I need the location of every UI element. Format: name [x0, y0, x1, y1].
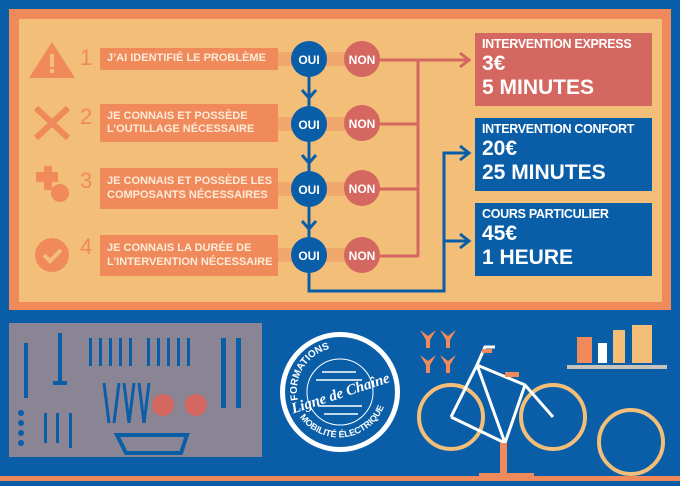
OUI / NON circles: OUI	[298, 183, 320, 197]
step 2 text	[100, 104, 278, 142]
OUI / NON circles: OUI	[298, 53, 320, 67]
result: cours: 45€	[482, 222, 517, 245]
result: express: 3€	[482, 52, 505, 75]
OUI / NON circles: NON	[349, 182, 375, 196]
panel: tool board	[9, 323, 262, 457]
blue connectors	[302, 60, 469, 291]
bottom strip	[0, 476, 680, 481]
OUI / NON circles: NON	[349, 249, 375, 263]
illustration: bike workshop	[417, 325, 667, 476]
result: cours: COURS PARTICULIER	[482, 207, 609, 221]
row bands	[278, 52, 368, 262]
result: express: 5 MINUTES	[482, 76, 594, 99]
step 3 text	[100, 168, 278, 209]
badge: Ligne de Chaîne: MOBILITÉ ÉLECTRIQUE	[300, 404, 384, 438]
step 1 text	[100, 48, 278, 70]
red connectors	[362, 53, 469, 257]
panel: decision flow	[9, 9, 671, 310]
result: cours	[475, 203, 652, 276]
badge: Ligne de Chaîne: Ligne de Chaîne	[288, 370, 392, 418]
step 3 text: JE CONNAIS ET POSSÈDE LES COMPOSANTS NÉCESSAIRES	[107, 175, 272, 200]
result: confort: 25 MINUTES	[482, 161, 606, 184]
result: cours: 1 HEURE	[482, 246, 573, 269]
step 4 text	[100, 235, 278, 276]
result: confort: 20€	[482, 137, 517, 160]
result: confort	[475, 118, 652, 191]
badge: Ligne de Chaîne: FORMATIONS	[290, 342, 329, 400]
flow lines and nodes	[29, 41, 472, 292]
text: 4	[80, 234, 92, 259]
OUI / NON circles: NON	[349, 53, 375, 67]
text: 2	[80, 104, 92, 129]
result: express	[475, 33, 652, 106]
OUI / NON circles	[291, 41, 380, 273]
numbers: 1	[80, 45, 92, 70]
OUI / NON circles: NON	[349, 117, 375, 131]
step 2 text: JE CONNAIS ET POSSÈDE L’OUTILLAGE NÉCESSAIRE	[107, 110, 254, 135]
OUI / NON circles: OUI	[298, 118, 320, 132]
badge: Ligne de Chaîne	[280, 332, 400, 452]
result: express: INTERVENTION EXPRESS	[482, 37, 631, 51]
result: confort: INTERVENTION CONFORT	[482, 122, 634, 136]
OUI / NON circles: OUI	[298, 249, 320, 263]
step 4 text: JE CONNAIS LA DURÉE DE L’INTERVENTION NÉCESSAIRE	[107, 242, 272, 268]
text: 3	[80, 168, 92, 193]
step 1 text: J’AI IDENTIFIÉ LE PROBLÈME	[107, 52, 266, 64]
icons	[29, 42, 75, 272]
